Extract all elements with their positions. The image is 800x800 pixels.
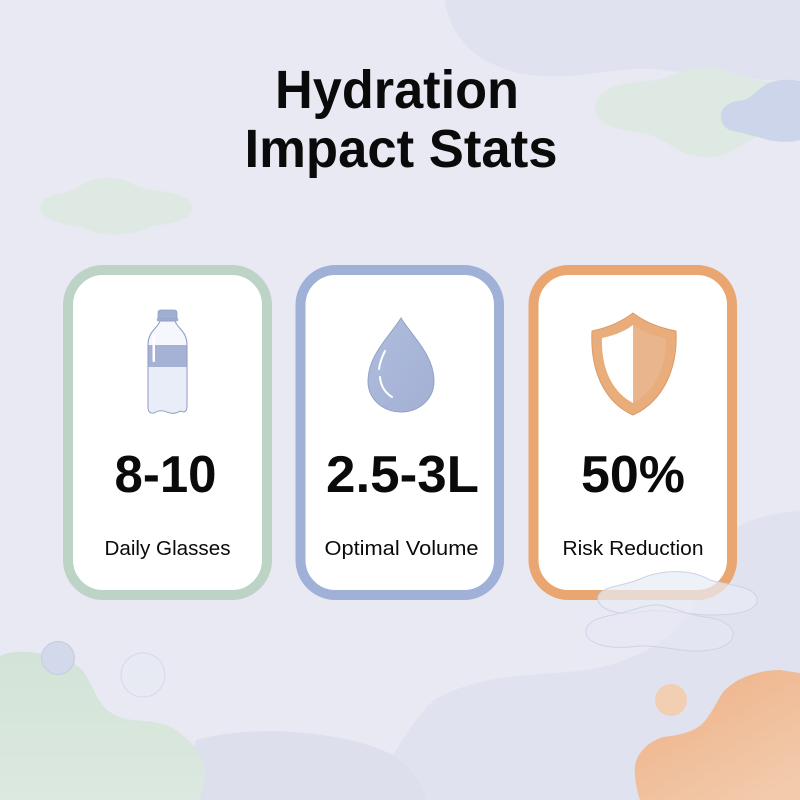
background blob: bottom right orange <box>635 670 800 800</box>
background bubble: pale <box>121 653 165 697</box>
stat value: 2.5-3L <box>326 446 479 504</box>
title <box>244 60 558 179</box>
background blob: top right blue <box>721 80 800 142</box>
stat value: 8-10 <box>114 446 216 504</box>
stat label: Risk Reduction <box>562 537 704 560</box>
background blob: left green <box>41 178 192 235</box>
background blob: bottom left green <box>0 652 205 800</box>
background blob: top right lavender <box>445 0 800 80</box>
translucent cloud: lower <box>586 605 733 651</box>
panel: optimal volume <box>300 270 499 595</box>
panel: daily glasses <box>68 270 267 595</box>
background bubble: orange <box>655 684 687 716</box>
icon: water bottle <box>148 310 187 413</box>
translucent cloud: upper <box>598 572 757 615</box>
icon: shield <box>592 313 676 415</box>
title: Impact Stats <box>244 119 558 179</box>
panel: risk reduction <box>534 270 732 595</box>
icon: water drop <box>368 318 434 412</box>
stat label: Optimal Volume <box>324 537 478 560</box>
background bubble: blue <box>42 642 74 674</box>
stat label: Daily Glasses <box>104 537 230 560</box>
stat value: 50% <box>581 446 685 504</box>
background blob: top right green <box>595 68 778 157</box>
background blob: lower right lavender <box>378 510 800 800</box>
title: Hydration <box>275 60 519 120</box>
background blob: bottom lavender <box>180 731 426 800</box>
